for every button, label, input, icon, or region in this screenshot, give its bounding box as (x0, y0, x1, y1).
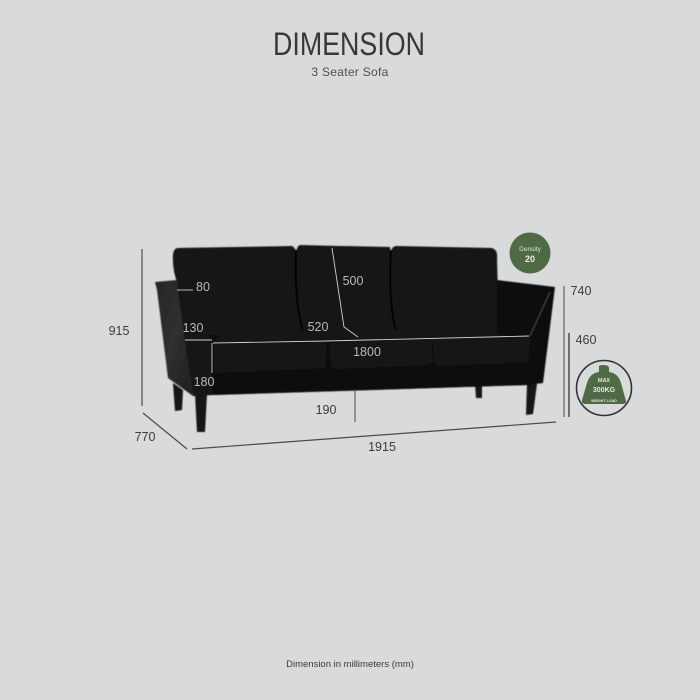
title: DIMENSION (273, 26, 425, 62)
back cushions (173, 245, 499, 335)
dimension labels on sofa (183, 274, 381, 389)
density badge: Density (519, 246, 542, 253)
white measure lines on sofa (177, 248, 529, 373)
dimension labels outside: 740 (571, 284, 591, 298)
dimension labels outside: 190 (316, 403, 336, 417)
front rail (212, 362, 528, 395)
density badge (510, 232, 550, 274)
left arm front (177, 281, 213, 396)
dimension labels on sofa: 180 (194, 375, 214, 389)
right arm (497, 280, 555, 385)
dimension labels outside: 460 (576, 333, 596, 347)
density badge: 20 (525, 254, 535, 264)
dimension labels on sofa: 520 (308, 320, 328, 334)
seat cushion fronts (214, 338, 530, 373)
footnote: Dimension in millimeters (mm) (286, 659, 414, 670)
dimension labels on sofa: 130 (183, 321, 203, 335)
dimension labels outside (109, 284, 596, 454)
dimension lines (142, 249, 569, 449)
sofa body base (190, 300, 530, 396)
dimension labels on sofa: 1800 (353, 345, 381, 359)
dimension labels outside: 770 (135, 430, 155, 444)
weight load badge (576, 360, 632, 416)
dimension labels outside: 1915 (368, 440, 396, 454)
sofa illustration (155, 245, 555, 432)
sofa legs (173, 383, 537, 432)
weight load badge: MAX (598, 378, 610, 384)
dimension labels on sofa: 80 (196, 280, 210, 294)
weight load badge: WEIGHT LOAD (591, 399, 617, 403)
dimension labels on sofa: 500 (343, 274, 363, 288)
weight load badge: 300KG (593, 387, 616, 394)
seat top (212, 329, 530, 342)
subtitle: 3 Seater Sofa (311, 65, 389, 79)
dimension labels outside: 915 (109, 324, 129, 338)
left arm side panel (155, 280, 193, 396)
